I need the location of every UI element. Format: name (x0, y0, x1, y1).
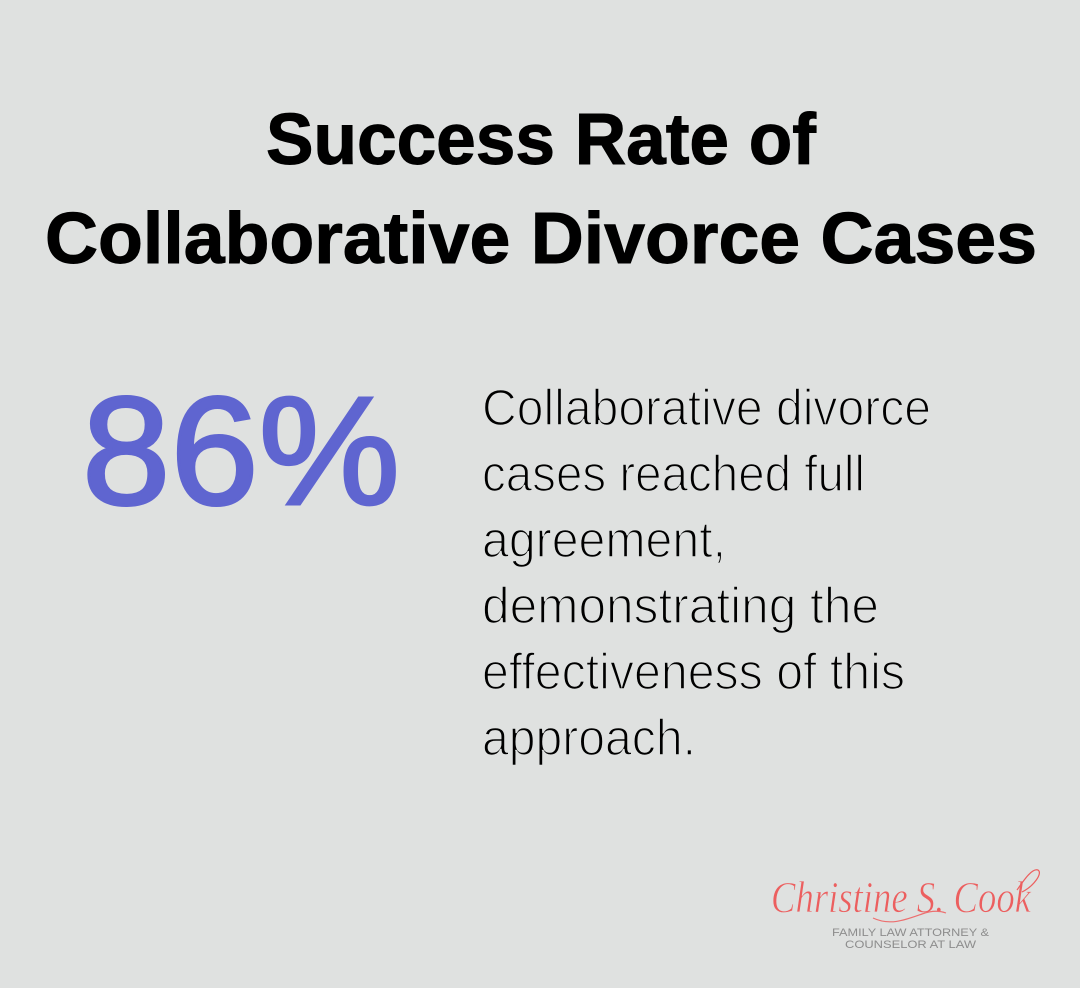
description text: cases reached full (482, 445, 865, 502)
logo: Christine S. Cook: Christine S. Cook (771, 873, 1032, 922)
description text: effectiveness of this (482, 643, 905, 700)
big statistic: 86%: 86% (82, 365, 400, 537)
description text (482, 379, 931, 766)
logo: Christine S. Cook: COUNSELOR AT LAW (845, 939, 977, 951)
logo: Christine S. Cook: FAMILY LAW ATTORNEY & (832, 927, 990, 939)
title: Success Rate of (266, 100, 817, 180)
description text: approach. (482, 709, 696, 766)
logo: Christine S. Cook (771, 870, 1039, 951)
title: Collaborative Divorce Cases (45, 199, 1037, 279)
title (45, 100, 1037, 279)
description text: agreement, (482, 511, 726, 568)
description text: Collaborative divorce (482, 379, 931, 436)
description text: demonstrating the (482, 577, 879, 634)
